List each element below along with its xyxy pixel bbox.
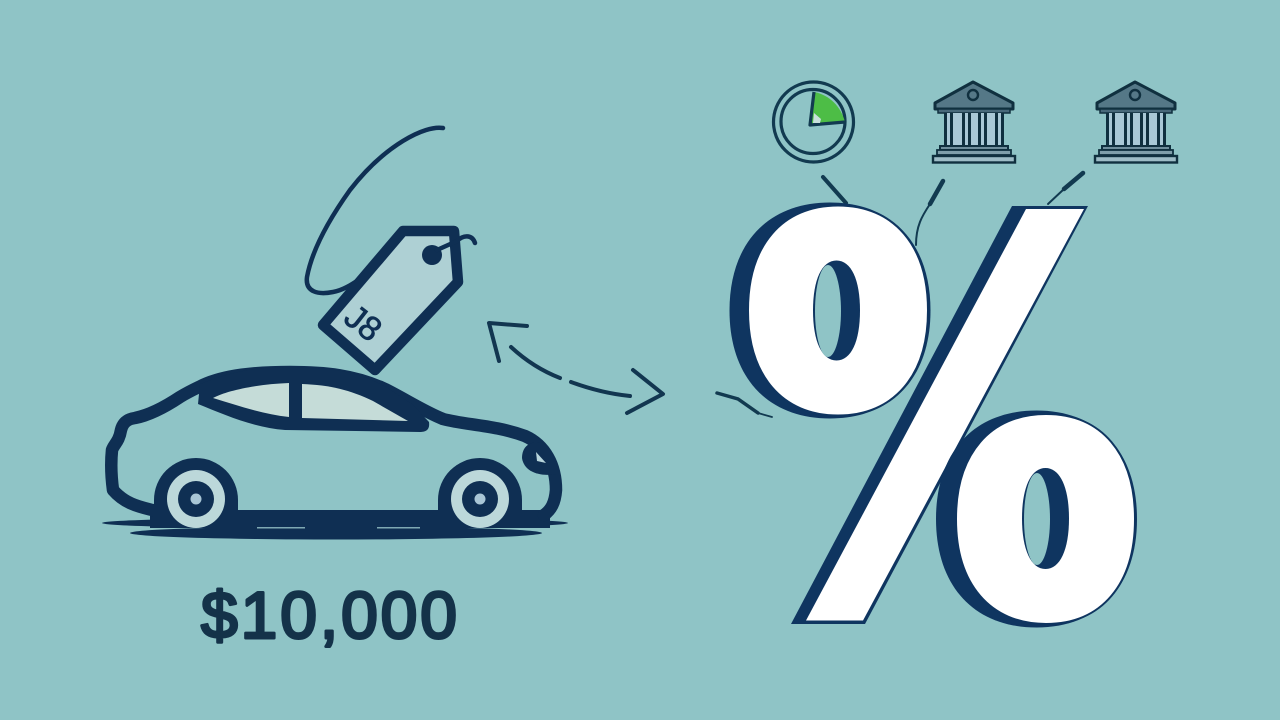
upper ring xyxy=(730,202,930,418)
icon: bank building left xyxy=(933,82,1015,162)
icon: car xyxy=(102,367,568,540)
car windows xyxy=(213,383,408,421)
headlight xyxy=(522,443,556,475)
lower ring xyxy=(936,410,1137,628)
slash xyxy=(791,206,1088,624)
front wheel xyxy=(438,458,522,528)
connector lines from icons to percent sign xyxy=(717,173,1083,417)
icon: clock with green wedge xyxy=(774,82,854,162)
icon: bank building right xyxy=(1095,82,1177,162)
rear wheel xyxy=(154,458,238,528)
price label: $10,000 xyxy=(201,578,457,652)
tag text: J8 xyxy=(337,297,389,349)
icon: price tag xyxy=(307,128,475,370)
double-headed dashed arrow xyxy=(489,323,663,413)
percent sign xyxy=(730,202,1137,628)
